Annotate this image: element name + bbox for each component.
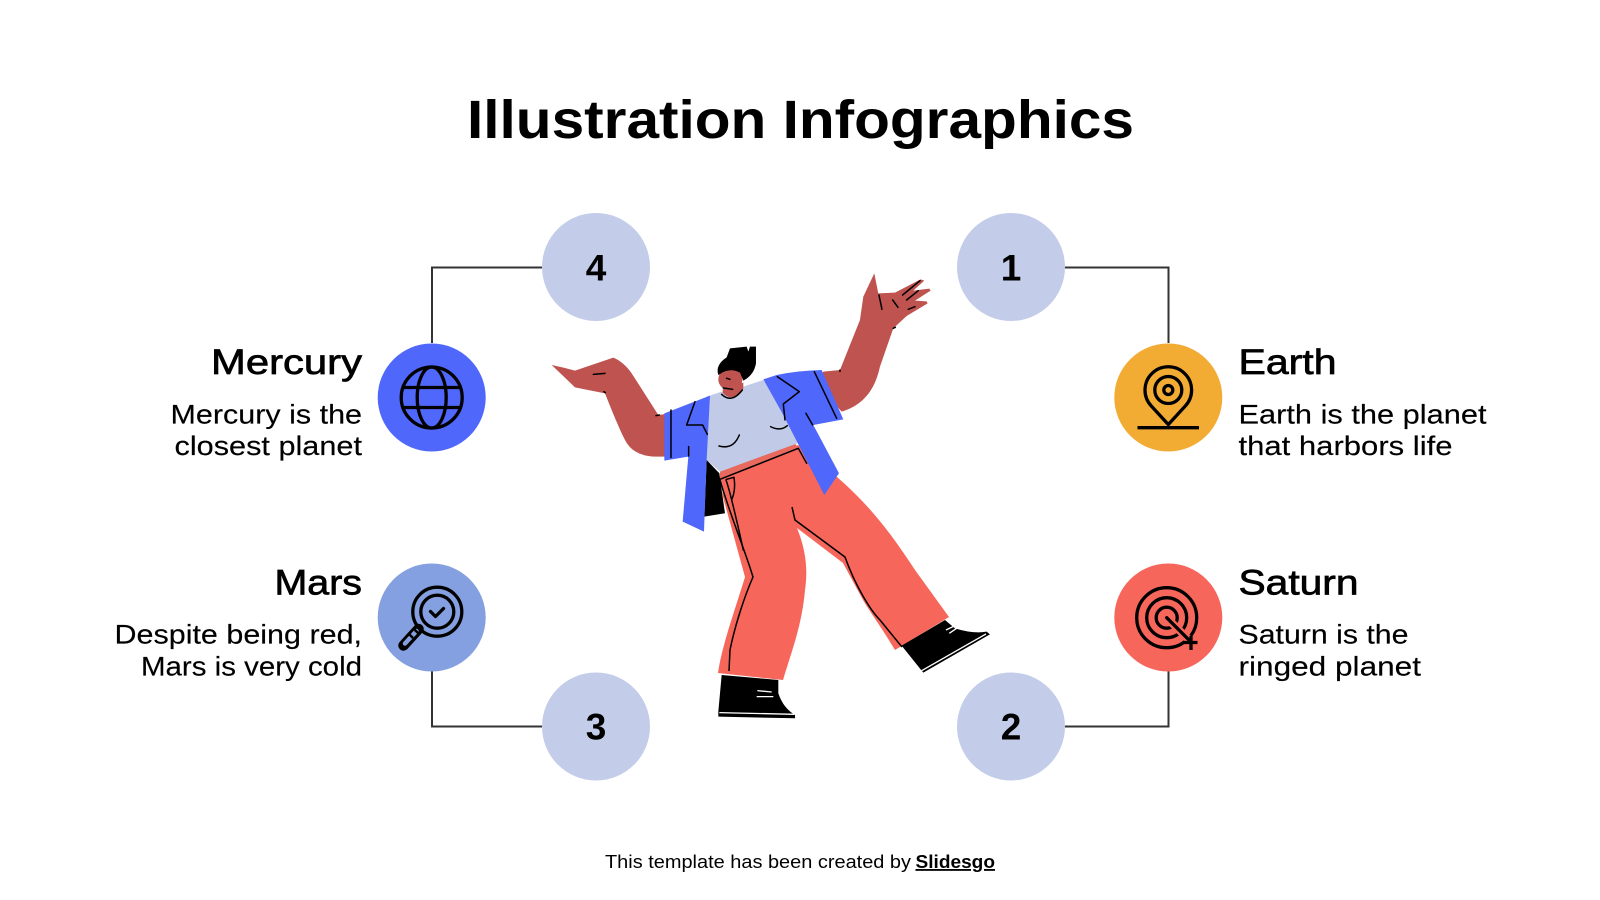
heading: Mercury: Mercury (211, 343, 363, 382)
text: Mercury description: closest planet (174, 431, 363, 461)
connector: 3 to Mars (432, 671, 542, 726)
lower pants seams (720, 480, 902, 671)
text: Saturn description (1238, 620, 1422, 682)
text: Mercury description: Mercury is the (170, 400, 362, 430)
text: Saturn description: ringed planet (1238, 652, 1422, 682)
connector: 2 to Saturn (1065, 671, 1168, 726)
icon: globe (378, 344, 486, 452)
heading: Earth: Earth (1238, 343, 1336, 382)
illustration: dancing person (552, 273, 990, 718)
text: Earth description (1238, 400, 1487, 461)
left arm and hand (552, 358, 670, 457)
number badge 1: 1 (1001, 248, 1021, 288)
back boot (902, 620, 990, 673)
connector: 1 to Earth (1065, 268, 1168, 343)
number badge 3 (542, 672, 650, 780)
text: Saturn description: Saturn is the (1238, 620, 1408, 650)
right jacket panel (763, 370, 843, 495)
text: Mercury description (170, 400, 363, 461)
number badge 4: 4 (586, 248, 607, 288)
panel: Mars (114, 564, 486, 682)
title: Illustration Infographics (467, 90, 1134, 150)
heading: Mars: Mars (274, 564, 362, 602)
number badge 4 (542, 213, 650, 321)
front boot (718, 675, 795, 718)
icon: target (1114, 564, 1222, 672)
number badge 2 (957, 672, 1065, 780)
panel: Saturn (1114, 564, 1422, 682)
left jacket panel (664, 396, 710, 532)
text: Mars description (114, 620, 362, 682)
t-shirt (707, 380, 799, 472)
right arm and hand (817, 273, 931, 412)
footer credit: Slidesgo (916, 851, 995, 872)
panel: Mercury (170, 343, 486, 461)
pants (718, 445, 949, 680)
text: Mars description: Despite being red, (114, 620, 362, 650)
icon: magnifier with check (378, 564, 486, 672)
inner black lining (704, 460, 725, 517)
upper body line details (593, 281, 920, 550)
footer credit: This template has been created by (605, 851, 912, 872)
number badge 2: 2 (1001, 706, 1021, 748)
pants waistband shade (720, 443, 798, 479)
head and neck (718, 368, 743, 397)
number badge 1 (957, 213, 1065, 321)
text: Mars description: Mars is very cold (141, 652, 362, 682)
heading: Saturn: Saturn (1238, 564, 1358, 602)
icon: location pin (1114, 344, 1222, 452)
number badge 3: 3 (586, 706, 606, 748)
text: Earth description: Earth is the planet (1238, 400, 1487, 430)
text: Earth description: that harbors life (1238, 431, 1452, 461)
hair (718, 347, 756, 381)
connector: 4 to Mercury (432, 268, 542, 343)
panel: Earth (1114, 343, 1487, 461)
